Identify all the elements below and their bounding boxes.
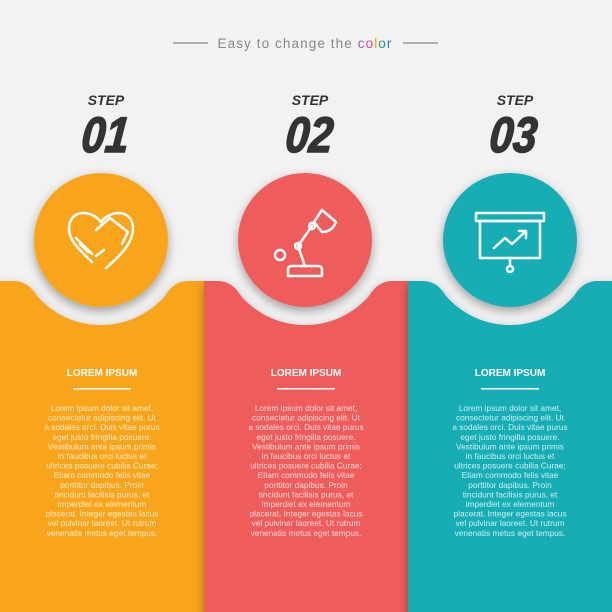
text: step 2: in faucibus orci luctus et: [262, 451, 351, 461]
text: step 1: Lorem ipsum dolor sit amet,: [51, 403, 153, 413]
text: step 2: Etiam commodo felis vitae: [258, 470, 355, 480]
text: step 1: LOREM IPSUM: [67, 368, 137, 379]
icon: handshake heart: [69, 213, 133, 268]
text: step 1: Etiam commodo felis vitae: [54, 470, 151, 480]
text: step 3: in faucibus orci luctus et: [466, 451, 555, 461]
panel: step 2: STEP: [292, 92, 329, 108]
text: step 3: a sodales orci. Duis vitae purus: [452, 422, 568, 432]
panel: step 3: 03: [487, 107, 540, 163]
text: step 1: [44, 368, 160, 538]
text: step 1: ultrices posuere cubilia Curae;: [46, 461, 158, 471]
text: step 3: Vestibulum ante ipsum primis: [456, 441, 564, 451]
text: step 1: Vestibulum ante ipsum primis: [48, 441, 156, 451]
text: step 2: LOREM IPSUM: [271, 368, 341, 379]
text: step 3: Etiam commodo felis vitae: [462, 470, 559, 480]
panel: step 1: STEP: [88, 92, 125, 108]
text: step 2: porttitor dapibus. Proin: [264, 480, 348, 490]
text: step 3: ultrices posuere cubilia Curae;: [454, 461, 566, 471]
text: step 2: placerat. Integer egestas lacus: [250, 509, 362, 519]
text: step 3: consectetur adipiscing elit. Ut: [456, 413, 565, 423]
text: step 1: imperdiet ex elementum: [58, 499, 146, 509]
text: step 1: tincidunt facilisis purus, et: [55, 489, 150, 499]
text: step 2: vel pulvinar laoreet. Ut rutrum: [252, 518, 360, 528]
text: step 1: placerat. Integer egestas lacus: [46, 509, 158, 519]
text: step 1: venenatis metus eget tempus.: [47, 528, 157, 538]
panel: step 3: STEP: [497, 92, 534, 108]
panel: step 1: [0, 92, 204, 612]
text: step 2: ultrices posuere cubilia Curae;: [250, 461, 362, 471]
text: step 3: vel pulvinar laoreet. Ut rutrum: [456, 518, 564, 528]
text: step 3: [452, 368, 568, 538]
title: Easy to change the color: [217, 36, 393, 51]
text: step 2: Lorem ipsum dolor sit amet,: [255, 403, 357, 413]
text: step 3: eget justo fringilla posuere.: [460, 432, 560, 442]
text: step 1: consectetur adipiscing elit. Ut: [48, 413, 157, 423]
text: step 2: consectetur adipiscing elit. Ut: [252, 413, 361, 423]
panel: step 2: [204, 92, 408, 612]
text: step 1: in faucibus orci luctus et: [58, 451, 147, 461]
text: step 1: a sodales orci. Duis vitae purus: [44, 422, 160, 432]
icon: desk lamp: [275, 210, 336, 276]
text: step 2: tincidunt facilisis purus, et: [259, 489, 354, 499]
text: step 1: porttitor dapibus. Proin: [60, 480, 144, 490]
text: step 3: venenatis metus eget tempus.: [455, 528, 565, 538]
text: step 3: tincidunt facilisis purus, et: [463, 489, 558, 499]
panel: step 2: 02: [283, 107, 336, 163]
panel: step 1: 01: [79, 107, 132, 163]
text: step 2: imperdiet ex elementum: [262, 499, 350, 509]
icon: presentation board: [476, 213, 544, 272]
panel: step 3: [408, 92, 612, 612]
text: step 2: Vestibulum ante ipsum primis: [252, 441, 360, 451]
text: step 3: Lorem ipsum dolor sit amet,: [459, 403, 561, 413]
text: step 1: vel pulvinar laoreet. Ut rutrum: [48, 518, 156, 528]
text: step 2: eget justo fringilla posuere.: [256, 432, 356, 442]
text: step 2: [248, 368, 364, 538]
text: step 1: eget justo fringilla posuere.: [52, 432, 152, 442]
text: step 3: imperdiet ex elementum: [466, 499, 554, 509]
text: step 3: LOREM IPSUM: [475, 368, 545, 379]
text: step 2: venenatis metus eget tempus.: [251, 528, 361, 538]
text: step 2: a sodales orci. Duis vitae purus: [248, 422, 364, 432]
text: step 3: placerat. Integer egestas lacus: [454, 509, 566, 519]
text: step 3: porttitor dapibus. Proin: [468, 480, 552, 490]
